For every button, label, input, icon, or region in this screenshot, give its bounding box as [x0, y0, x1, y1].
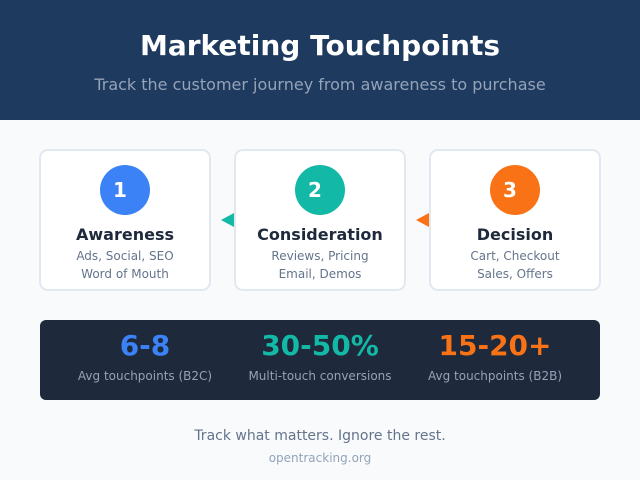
icon: step 3 circle — [490, 165, 540, 215]
panel: stats — [40, 320, 600, 400]
text: decision channels: Cart, Checkout — [470, 249, 560, 263]
stat: multi-touch: 30-50% — [261, 329, 379, 362]
subtitle: Track the customer journey from awareness to purchase — [93, 75, 546, 94]
footer tagline: Track what matters. Ignore the rest. — [193, 428, 446, 444]
stat: B2C: Avg touchpoints (B2C) — [78, 369, 212, 383]
stat: B2C — [78, 329, 212, 383]
footer url: opentracking.org — [269, 451, 371, 465]
text: awareness channels: Word of Mouth — [81, 267, 169, 281]
icon: step 2 circle: 2 — [308, 178, 322, 202]
heading: decision: Decision — [477, 225, 553, 244]
text: decision channels: Sales, Offers — [477, 267, 553, 281]
stat: B2C: 6-8 — [120, 329, 170, 362]
heading: awareness: Awareness — [76, 225, 174, 244]
stat: B2B — [428, 329, 562, 383]
arrow: teal — [221, 213, 234, 227]
icon: step 1 circle: 1 — [113, 178, 127, 202]
panel: awareness — [40, 150, 210, 290]
arrow: orange — [416, 213, 429, 227]
panel: consideration — [235, 150, 405, 290]
stat: multi-touch — [248, 329, 392, 383]
icon: step 1 circle — [100, 165, 150, 215]
title: Marketing Touchpoints — [140, 29, 500, 62]
stat: multi-touch: Multi-touch conversions — [248, 369, 392, 383]
icon: step 2 circle — [295, 165, 345, 215]
text: consideration channels: Email, Demos — [279, 267, 361, 281]
header — [0, 0, 640, 120]
text: awareness channels: Ads, Social, SEO — [76, 249, 174, 263]
text: consideration channels: Reviews, Pricing — [271, 249, 369, 263]
heading: consideration: Consideration — [257, 225, 383, 244]
stat: B2B: Avg touchpoints (B2B) — [428, 369, 562, 383]
panel: decision — [430, 150, 600, 290]
icon: step 3 circle: 3 — [503, 178, 517, 202]
stat: B2B: 15-20+ — [438, 329, 552, 362]
